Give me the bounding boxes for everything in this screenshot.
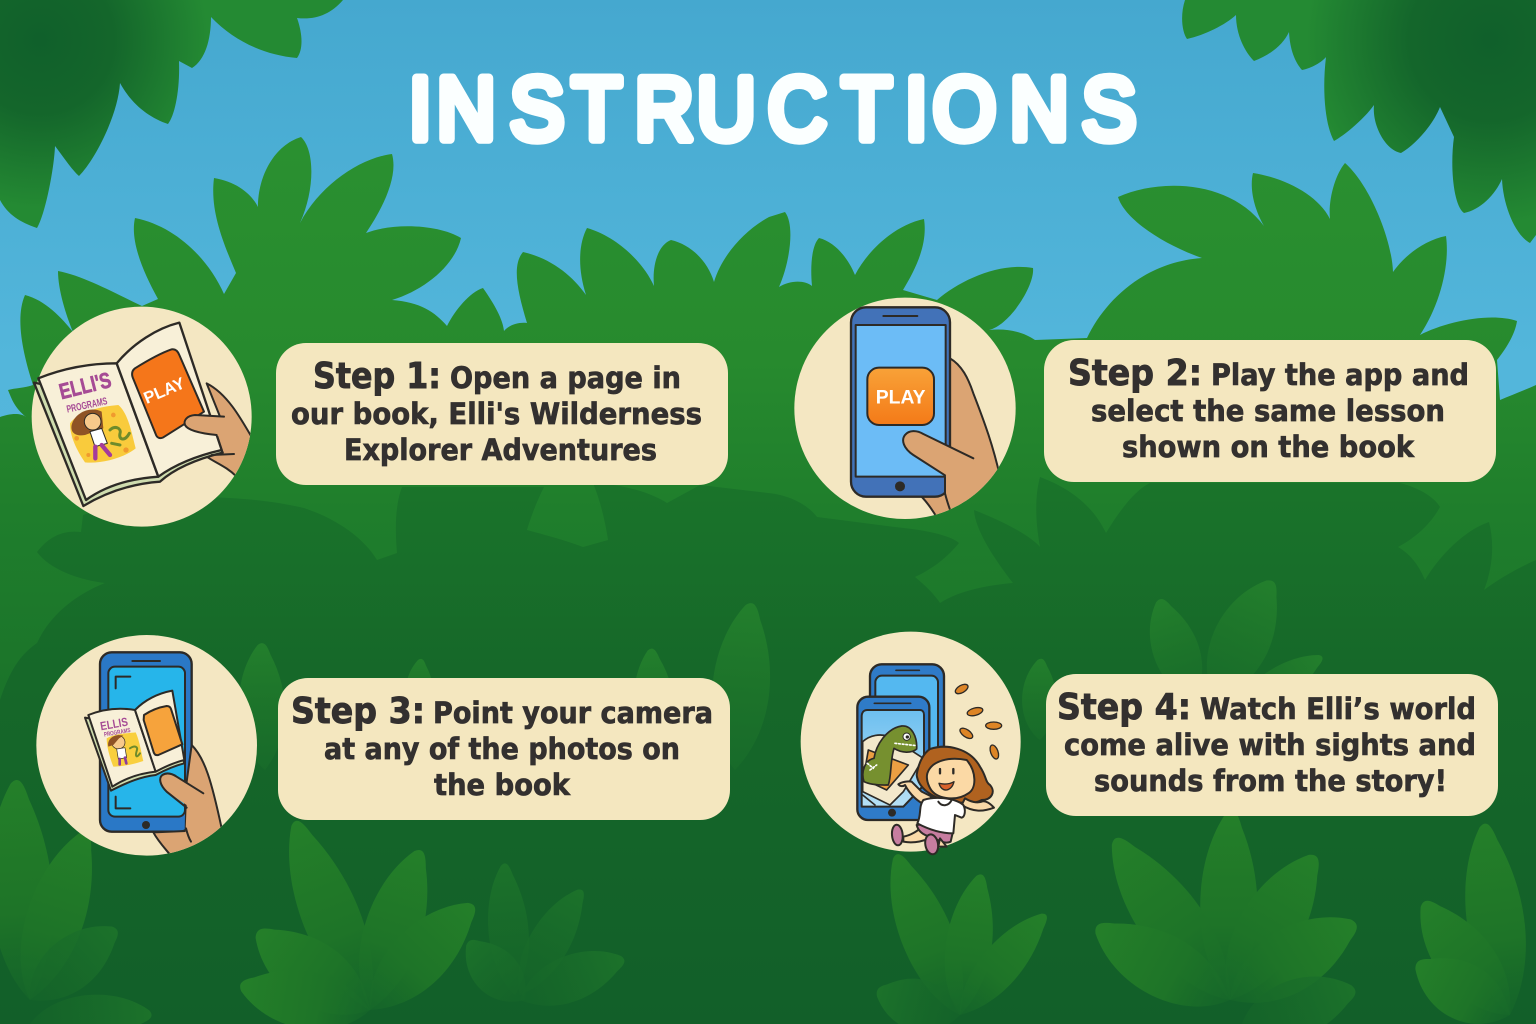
- thumb: [185, 415, 240, 447]
- book in view: [85, 691, 184, 791]
- step 4 text: Step 4:: [1057, 687, 1191, 728]
- foliage: top-right corner leaves: [1182, 0, 1536, 243]
- girl: [891, 747, 994, 855]
- step 4 text: [1057, 687, 1476, 798]
- book: [34, 323, 223, 506]
- title: INSTRUCTIONS: [409, 59, 1136, 158]
- book cover art: PROGRAMS: [65, 395, 108, 415]
- phone: [100, 652, 192, 832]
- step 2 card: [1044, 340, 1496, 482]
- hand holding book: [207, 383, 253, 477]
- foliage: darker mid-ground mass: [0, 477, 1536, 1024]
- phone: [851, 307, 950, 497]
- step 3 text: Point your camera: [433, 696, 713, 730]
- step 4 text: come alive with sights and: [1064, 728, 1476, 762]
- icon: camera pointed at book: [36, 635, 257, 862]
- hand behind phone: [920, 358, 1000, 523]
- foliage: top-left corner leaves: [0, 0, 343, 228]
- step 2 text: shown on the book: [1122, 430, 1415, 464]
- step 3 text: at any of the photos on: [324, 732, 680, 766]
- icon: girl with phones and snake: [801, 632, 1021, 855]
- step 3 text: the book: [434, 768, 571, 802]
- confetti: [954, 682, 1002, 760]
- step 3 text: [291, 691, 713, 802]
- icon: camera pointed at book: ELLIS: [99, 716, 129, 734]
- step 1 card: [276, 343, 728, 485]
- step 4 card: [1046, 674, 1498, 816]
- foliage: bottom leaf cluster right: [870, 810, 1536, 1024]
- step 1 text: Open a page in: [450, 361, 681, 395]
- step 2 text: Play the app and: [1211, 358, 1469, 392]
- front phone: [857, 697, 929, 820]
- hand: [153, 745, 222, 862]
- step 1 text: our book, Elli's Wilderness: [291, 397, 702, 431]
- orange play page: [132, 349, 204, 438]
- step 2 text: Step 2:: [1068, 353, 1202, 394]
- step 3 card: [278, 678, 730, 820]
- step 1 text: [291, 356, 702, 467]
- book cover art: [57, 368, 136, 463]
- foliage: bottom leaf cluster centre left: [235, 811, 632, 1024]
- icon: hand holding phone with play button: [794, 298, 1016, 523]
- step 1 text: Step 1:: [313, 356, 441, 397]
- book cover art: ELLI'S: [57, 368, 114, 405]
- step 3 text: Step 3:: [291, 691, 425, 732]
- thumb: [160, 773, 217, 845]
- icon: camera pointed at book: PROGRAMS: [104, 727, 131, 739]
- play button: PLAY: [876, 387, 926, 408]
- step 4 text: sounds from the story!: [1094, 764, 1447, 798]
- step 1 text: Explorer Adventures: [344, 433, 657, 467]
- icon: open book with play page: [32, 307, 253, 527]
- play button: [867, 368, 934, 425]
- step 2 text: select the same lesson: [1091, 394, 1445, 428]
- foliage: middle layer leaves: [237, 568, 1331, 772]
- emerging book and snake: [863, 726, 923, 805]
- orange play page: PLAY: [141, 373, 188, 408]
- step 4 text: Watch Elli’s world: [1200, 692, 1476, 726]
- foliage: bottom leaf cluster left: [0, 778, 153, 1024]
- thumb: [903, 431, 985, 512]
- back phone: [870, 664, 944, 798]
- step 2 text: [1068, 353, 1469, 464]
